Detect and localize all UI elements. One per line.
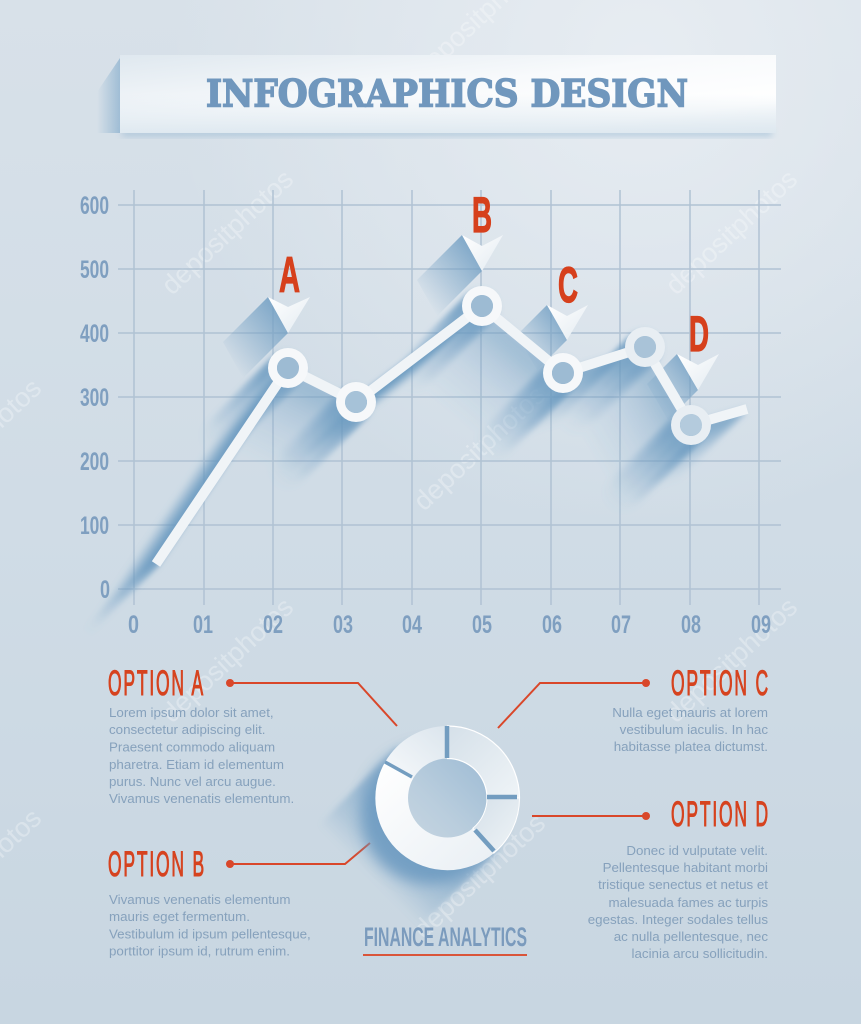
donut chart (307, 726, 520, 939)
y axis labels: 100 (80, 512, 109, 540)
panel: option A: OPTION A (108, 663, 205, 703)
y axis labels: 600 (80, 192, 109, 220)
segment: large (375, 762, 494, 870)
marker C: C (558, 257, 578, 313)
watermarks: depositphotos (660, 164, 803, 300)
title banner (97, 55, 776, 136)
x axis labels: 07 (611, 611, 631, 639)
x axis labels: 02 (263, 611, 283, 639)
y axis labels: 400 (80, 320, 109, 348)
segment gaps (385, 726, 517, 851)
marker shadows (223, 235, 698, 420)
panel: option B: Vivamus venenatis elementum (109, 892, 290, 907)
point holes (277, 295, 702, 436)
panel: option A: consectetur adipiscing elit. (109, 722, 266, 737)
panel: option D: ac nulla pellentesque, nec (614, 929, 768, 944)
segment: upper left (385, 726, 448, 778)
marker D (677, 306, 719, 390)
watermarks: depositphotos (408, 380, 551, 516)
marker B (462, 187, 503, 271)
x axis labels (128, 611, 771, 639)
panel: option C: habitasse platea dictumst. (614, 739, 768, 754)
y axis labels: 300 (80, 384, 109, 412)
banner shadow (97, 58, 772, 136)
y axis labels: 500 (80, 256, 109, 284)
title: INFOGRAPHICS DESIGN (206, 72, 688, 116)
panel: option B: porttitor ipsum id, rutrum enim. (109, 944, 290, 958)
panel: option D: OPTION D (671, 794, 770, 834)
segment: upper right (448, 726, 520, 798)
x axis labels: 06 (542, 611, 562, 639)
x axis labels: 03 (333, 611, 353, 639)
finance analytics label: FINANCE ANALYTICS (364, 922, 527, 952)
panel: option D: Pellentesque habitant morbi (603, 860, 768, 875)
panel: option B: OPTION B (108, 844, 206, 884)
panel: option A: purus. Nunc vel arcu augue. (109, 774, 276, 789)
panel: option B (108, 844, 311, 958)
panel: option D: lacinia arcu sollicitudin. (632, 946, 768, 961)
x axis labels: 08 (681, 611, 701, 639)
data points (268, 286, 711, 445)
marker A (268, 247, 310, 333)
panel: option B: Vestibulum id ipsum pellentesque, (109, 926, 311, 942)
x axis labels: 0 (128, 611, 139, 639)
panel: option D: tristique senectus et netus et (598, 877, 768, 892)
panel: option D: egestas. Integer sodales tellus (588, 912, 768, 927)
watermarks: depositphotos (408, 808, 551, 944)
marker A: A (279, 247, 300, 303)
panel: option A (108, 663, 294, 806)
y axis labels (80, 192, 110, 604)
y axis labels: 0 (100, 576, 110, 604)
x axis labels: 01 (193, 611, 213, 639)
panel: option C: Nulla eget mauris at lorem (612, 705, 768, 720)
donut shadow (307, 744, 501, 939)
panel: option C: vestibulum iaculis. In hac (620, 722, 768, 737)
panel: option B: mauris eget fermentum. (109, 909, 250, 924)
panel: option A: Vivamus venenatis elementum. (109, 791, 294, 806)
panel: option A: Lorem ipsum dolor sit amet, (109, 705, 274, 720)
marker D: D (689, 306, 709, 362)
x axis labels: 09 (751, 611, 771, 639)
x axis labels: 04 (402, 611, 422, 639)
line chart (80, 187, 781, 639)
marker C (547, 257, 588, 340)
panel: option A: Praesent commodo aliquam (109, 740, 275, 754)
line shadow (88, 293, 745, 632)
panel: option C (612, 663, 770, 754)
watermarks: depositphotos (156, 592, 299, 728)
x axis labels: 05 (472, 611, 492, 639)
donut hole (406, 757, 488, 839)
panel: option D (588, 794, 770, 961)
segment: lower right (473, 798, 520, 853)
watermarks: depositphotos (660, 592, 803, 728)
panel: option C: OPTION C (671, 663, 770, 703)
marker B: B (472, 187, 492, 243)
panel: option D: malesuada fames ac turpis (609, 895, 768, 910)
panel: option A: pharetra. Etiam id elementum (109, 757, 284, 772)
data line (156, 306, 747, 564)
leader lines (226, 679, 650, 868)
y axis labels: 200 (80, 448, 109, 476)
panel: option D: Donec id vulputate velit. (626, 843, 768, 858)
watermarks: depositphotos (156, 164, 299, 300)
grid (118, 190, 781, 605)
